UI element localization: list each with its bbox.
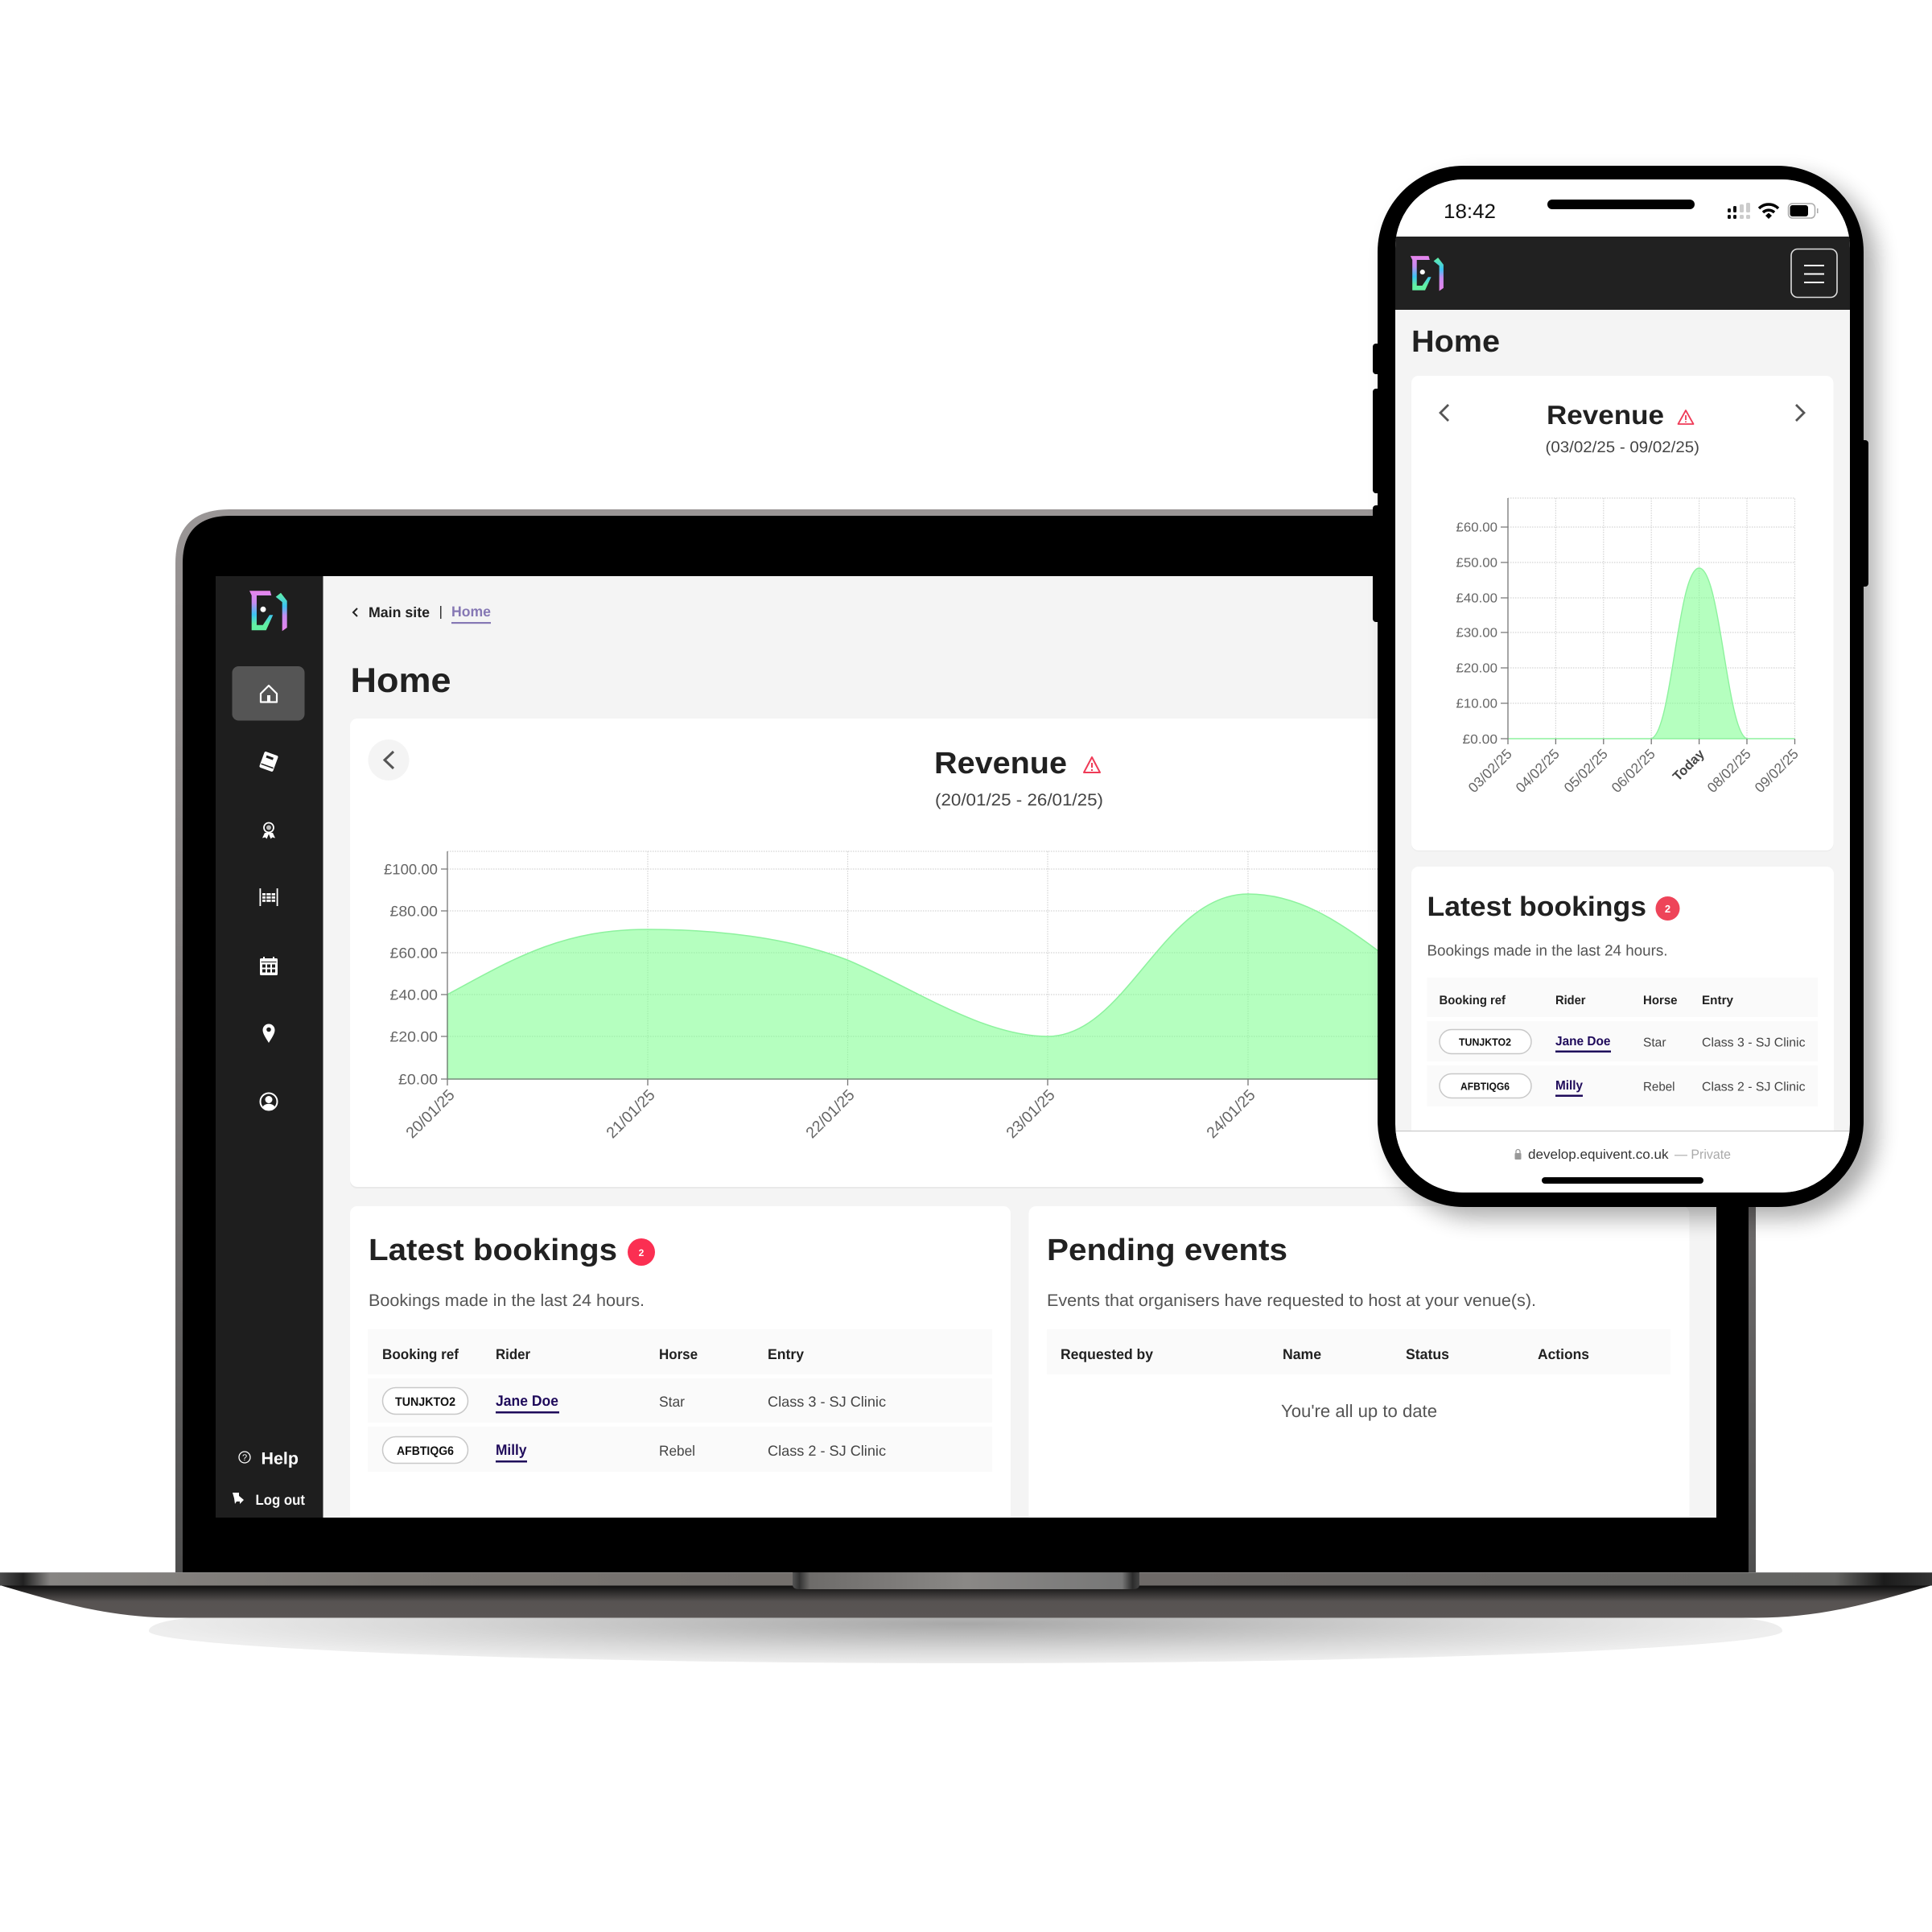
status bar: 18:42 <box>1444 200 1496 223</box>
count badge <box>1656 896 1680 921</box>
area chart: £40.00 <box>1456 592 1497 605</box>
empty state: You're all up to date <box>1281 1401 1437 1421</box>
area chart: 22/01/25 <box>802 1086 859 1142</box>
bookings table: TUNJKTO2 <box>395 1395 455 1409</box>
page heading: Home <box>351 661 451 700</box>
heading: Pending events <box>1047 1234 1287 1267</box>
breadcrumb: Home <box>451 603 491 620</box>
area chart: £100.00 <box>384 861 438 877</box>
bookings table: Booking ref <box>382 1346 459 1362</box>
bookings table: Star <box>1643 1036 1666 1049</box>
phone page heading: Home <box>1411 325 1500 359</box>
heading: Revenue <box>1547 400 1664 430</box>
laptop base <box>0 1572 1932 1617</box>
icon: fence <box>259 888 278 906</box>
count badge: 2 <box>639 1247 645 1258</box>
log out link <box>233 1492 305 1508</box>
bookings table: Star <box>659 1394 685 1410</box>
bookings table: Class 3 - SJ Clinic <box>768 1394 886 1410</box>
icon: home <box>261 686 277 702</box>
log out link: Log out <box>256 1492 305 1508</box>
bookings table: AFBTIQG6 <box>1460 1080 1510 1093</box>
icon: lock <box>1514 1149 1521 1160</box>
phone body <box>1378 166 1864 1207</box>
bookings table: Rebel <box>659 1443 695 1459</box>
bookings table: Rebel <box>1643 1080 1675 1094</box>
area chart <box>384 851 1392 1142</box>
help link: Help <box>261 1450 299 1468</box>
address bar: develop.equivent.co.uk <box>1528 1147 1669 1162</box>
events table header: Name <box>1283 1346 1321 1362</box>
area chart: 05/02/25 <box>1561 746 1611 796</box>
area chart: Today <box>1670 747 1707 784</box>
date range: (03/02/25 - 09/02/25) <box>1545 439 1699 456</box>
previous week button <box>369 739 409 781</box>
address bar <box>1395 1131 1850 1193</box>
area chart: 20/01/25 <box>402 1086 459 1142</box>
area chart: £20.00 <box>389 1028 438 1044</box>
date range: (20/01/25 - 26/01/25) <box>935 791 1103 809</box>
heading: Latest bookings <box>1427 892 1646 922</box>
bookings table: Milly <box>1555 1079 1583 1093</box>
phone app header <box>1395 237 1850 310</box>
bookings table: Booking ref <box>1439 994 1506 1007</box>
bookings table: Class 2 - SJ Clinic <box>1702 1080 1806 1094</box>
bookings table <box>381 1349 886 1464</box>
mockup scene <box>0 163 1932 1663</box>
area chart: £40.00 <box>389 987 438 1003</box>
phone logo <box>1411 256 1444 291</box>
phone shadow <box>1390 177 1876 1218</box>
address bar: — Private <box>1675 1147 1731 1162</box>
area chart: £20.00 <box>1456 661 1497 676</box>
icon: warning <box>1084 757 1100 772</box>
events table header: Requested by <box>1061 1346 1153 1362</box>
count badge: 2 <box>1665 903 1670 915</box>
events table header <box>1061 1349 1588 1362</box>
area chart: 23/01/25 <box>1003 1086 1059 1142</box>
area chart: £60.00 <box>389 945 438 961</box>
phone panel: revenue <box>1411 376 1833 851</box>
bookings table <box>1427 978 1818 1106</box>
icon: warning <box>1679 410 1693 424</box>
bookings table: Jane Doe <box>496 1392 558 1409</box>
phone side buttons <box>1373 344 1868 622</box>
revenue heading: Revenue <box>934 747 1067 781</box>
active nav button <box>232 666 304 721</box>
events table header: Status <box>1406 1346 1449 1362</box>
bookings table: Entry <box>768 1346 804 1362</box>
bookings table: Rider <box>496 1346 530 1362</box>
icon: menu <box>1791 249 1837 298</box>
laptop screen <box>216 576 1716 1544</box>
area chart: 09/02/25 <box>1752 746 1802 796</box>
bookings table: Horse <box>1643 994 1678 1007</box>
icon: map pin <box>262 1024 275 1043</box>
panel: latest bookings <box>350 1206 1011 1544</box>
help link <box>239 1450 299 1468</box>
breadcrumb: Main site <box>369 604 430 620</box>
description: Events that organisers have requested to host at your venue(s). <box>1047 1291 1536 1310</box>
bookings table: Milly <box>496 1441 527 1458</box>
bookings table: Entry <box>1702 994 1733 1007</box>
phone panel: latest bookings <box>1411 867 1834 1156</box>
chevrons <box>1440 405 1804 421</box>
area chart: 04/02/25 <box>1513 746 1563 796</box>
bookings table: Rider <box>1555 994 1585 1007</box>
bookings table: TUNJKTO2 <box>1459 1036 1511 1048</box>
area chart: £10.00 <box>1456 697 1497 711</box>
area chart: 06/02/25 <box>1609 746 1658 796</box>
bookings table: Class 3 - SJ Clinic <box>1702 1036 1806 1049</box>
panel: revenue <box>350 719 1410 1188</box>
area chart: £50.00 <box>1456 557 1497 570</box>
area chart: £30.00 <box>1456 626 1497 641</box>
bookings table: Jane Doe <box>1555 1035 1611 1048</box>
help link: ? <box>242 1453 247 1463</box>
area chart: 21/01/25 <box>603 1086 659 1142</box>
phone <box>1373 166 1868 1207</box>
bookings table: AFBTIQG6 <box>397 1444 454 1458</box>
icon: award <box>262 822 275 838</box>
heading: Latest bookings <box>369 1234 617 1267</box>
area chart: £60.00 <box>1456 521 1497 534</box>
bookings table: Horse <box>659 1346 698 1362</box>
phone screen <box>1395 179 1850 1193</box>
laptop lid <box>175 509 1756 1572</box>
area chart: 24/01/25 <box>1203 1086 1259 1142</box>
count badge <box>628 1238 655 1266</box>
area chart: 03/02/25 <box>1465 746 1515 796</box>
sidebar <box>216 576 323 1518</box>
breadcrumb <box>353 603 491 624</box>
panel: pending events <box>1028 1206 1690 1544</box>
icon: calendar <box>260 957 278 975</box>
area chart <box>1456 498 1802 796</box>
icon: book <box>259 752 278 772</box>
description: Bookings made in the last 24 hours. <box>1427 943 1667 959</box>
icon: user <box>261 1093 277 1110</box>
laptop shadow <box>149 1617 1782 1663</box>
area chart: £0.00 <box>1463 733 1497 747</box>
events table header: Actions <box>1538 1346 1589 1362</box>
area chart: £0.00 <box>398 1072 438 1088</box>
area chart: £80.00 <box>389 903 438 919</box>
logo <box>249 591 287 631</box>
area chart: 08/02/25 <box>1704 746 1754 796</box>
bookings table: Class 2 - SJ Clinic <box>768 1443 886 1459</box>
description: Bookings made in the last 24 hours. <box>369 1291 645 1310</box>
status bar <box>1395 179 1850 237</box>
